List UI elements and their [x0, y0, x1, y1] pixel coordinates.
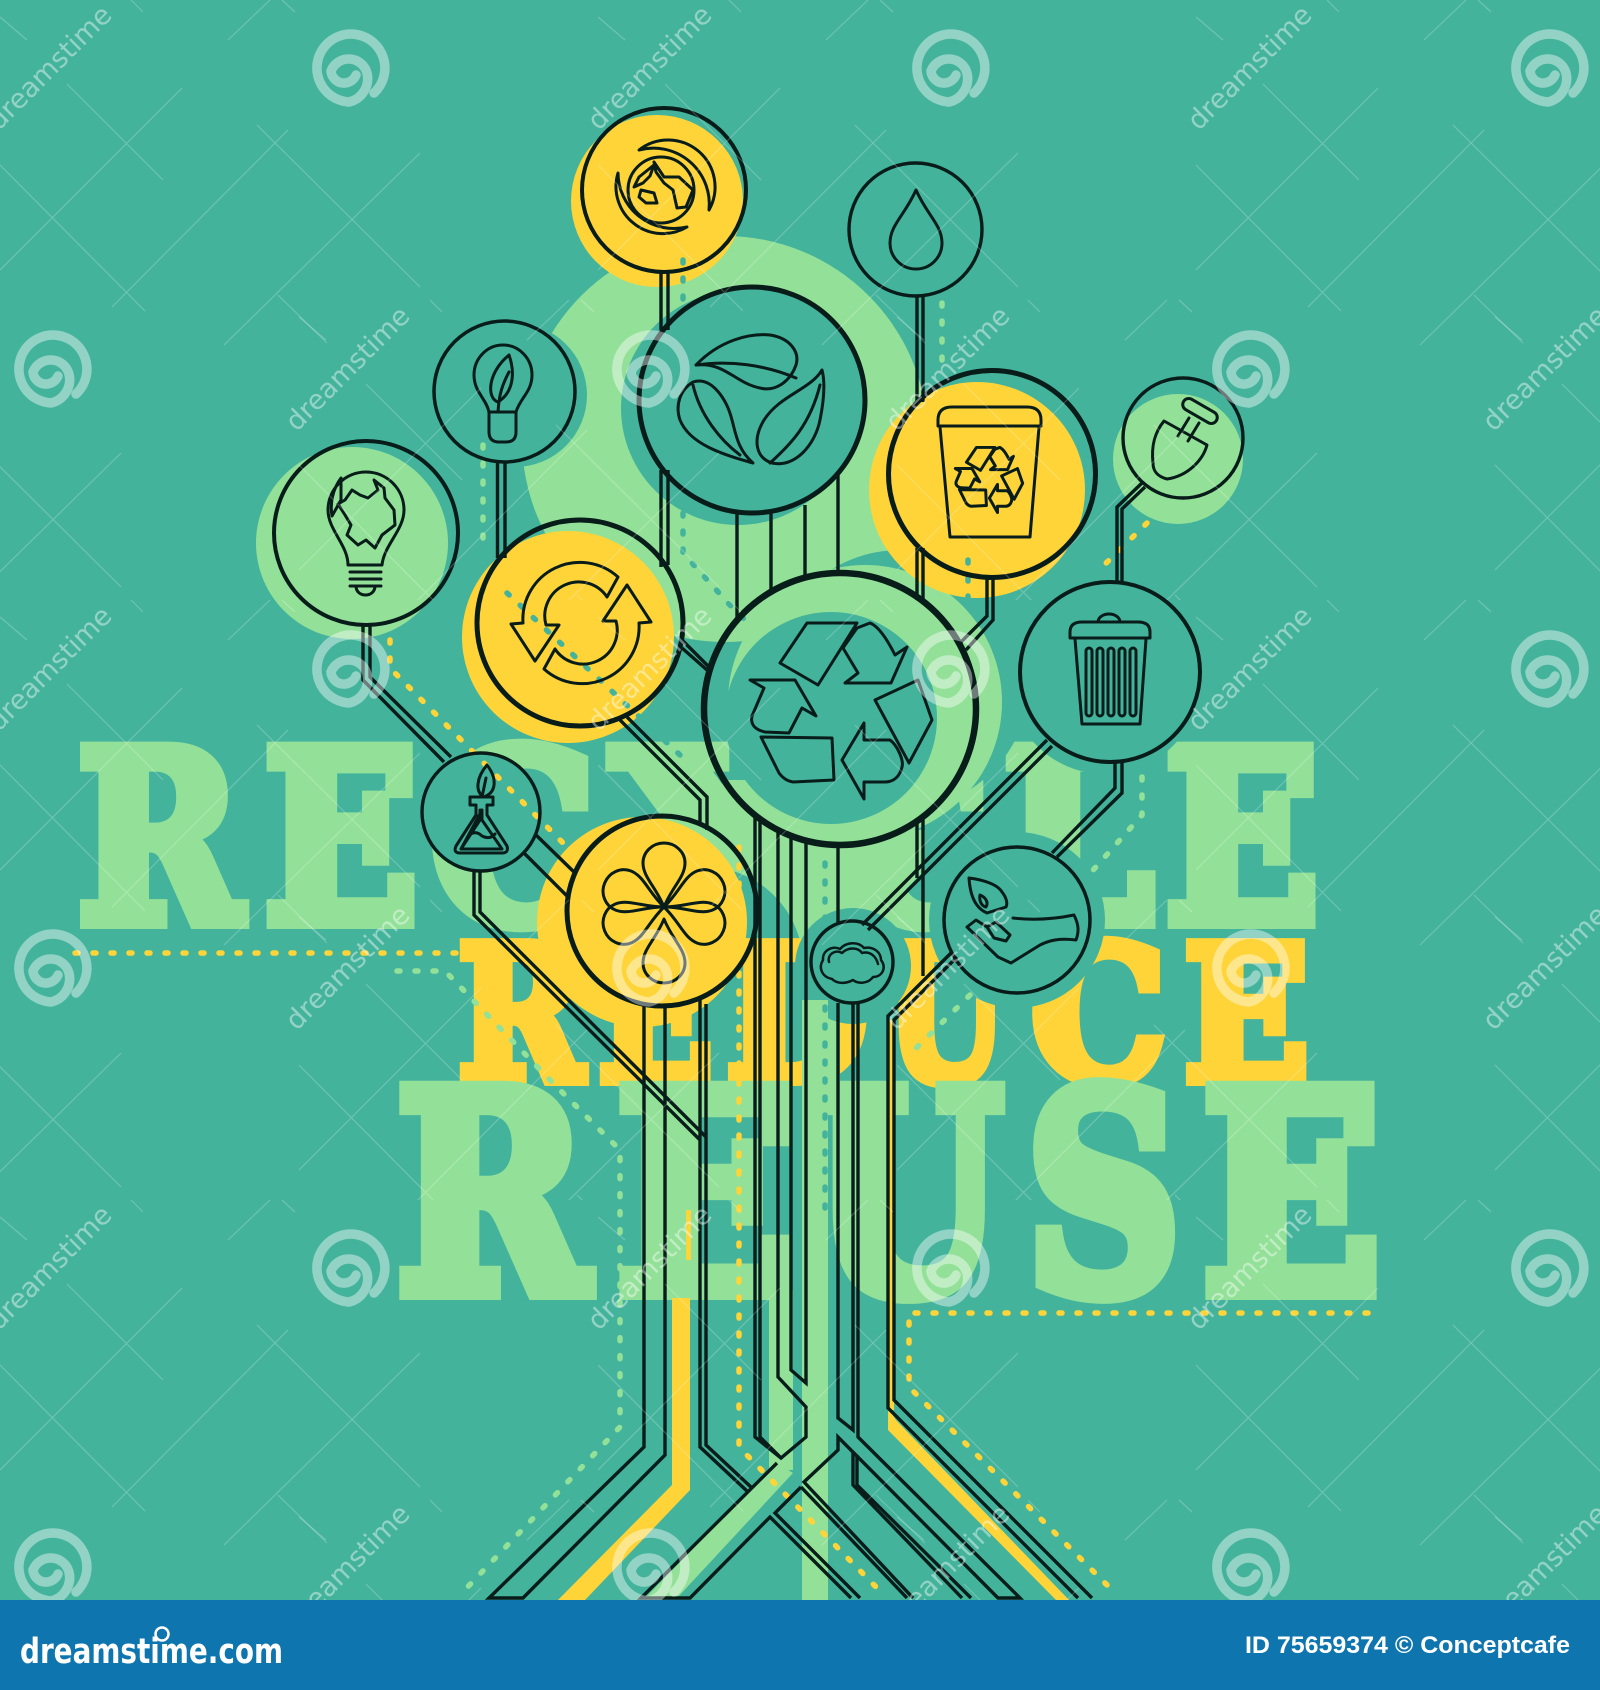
watermark: dreamstime text: dreamstime	[280, 301, 416, 437]
headline: REUSE	[396, 1033, 1381, 1357]
headline: RECYCLE: L	[1003, 701, 1153, 977]
headline: REDUCE: E	[598, 906, 713, 1124]
circle: trash can	[1020, 582, 1200, 762]
circle: flask	[422, 753, 540, 871]
connector lines: lower branches	[838, 740, 1122, 1598]
circle: shovel	[1123, 378, 1243, 498]
headline: REDUCE: D	[726, 906, 868, 1124]
main circle light green disc	[728, 565, 1002, 839]
coloured fill discs	[256, 115, 1243, 1027]
watermark: dreamstime text: dreamstime	[280, 900, 416, 1036]
headline: REUSE: R	[396, 1033, 591, 1357]
icon: earth light bulb	[328, 472, 404, 595]
headline: RECYCLE: C	[845, 701, 990, 977]
circle: water drop	[849, 163, 982, 296]
icon: shovel	[1152, 396, 1219, 479]
icon: globe with arrows	[616, 140, 715, 234]
circle: earth	[582, 108, 746, 272]
circle: recycling bin	[888, 370, 1096, 578]
icon: water drop	[890, 190, 942, 269]
circle: earth bulb	[274, 441, 458, 625]
watermark: dreamstime text: dreamstime	[582, 601, 718, 737]
trunk light green area	[722, 780, 840, 950]
footer bar	[0, 1600, 1600, 1690]
watermark: dreamstime text: dreamstime	[280, 1499, 416, 1635]
headline: REDUCE: U	[886, 906, 1006, 1124]
icon: three leaves	[678, 335, 824, 464]
icon: cloud	[821, 943, 884, 983]
icon: recycling symbol	[750, 623, 932, 799]
icon: hand holding leaf	[967, 878, 1078, 963]
icon: flower of drops	[597, 843, 731, 983]
main circle teal inner disc	[725, 612, 937, 824]
headline: RECYCLE: C	[430, 701, 596, 977]
headline: RECYCLE: R	[78, 701, 243, 977]
headline: REDUCE: E	[1184, 906, 1309, 1124]
icon: bulb with leaf	[474, 345, 532, 442]
circle: leaf bulb	[434, 321, 575, 462]
flower teal shadow disc	[607, 867, 803, 1063]
icon: flask with flame	[455, 765, 507, 853]
headline: REUSE: E	[1202, 1033, 1381, 1357]
watermark: dreamstime text: dreamstime	[880, 301, 1016, 437]
leaf circle teal fill	[641, 289, 863, 511]
circle: main recycling	[704, 573, 976, 845]
headline: REUSE: S	[1026, 1033, 1181, 1357]
big light green disc behind tree	[522, 236, 928, 642]
headline: REDUCE: C	[1031, 906, 1166, 1124]
headline: RECYCLE	[78, 701, 1319, 977]
icon: refresh arrows	[511, 562, 651, 684]
circle: leaves	[639, 287, 865, 513]
watermark: dreamstime text: dreamstime	[880, 900, 1016, 1036]
watermark: dreamstime text: dreamstime	[582, 1200, 718, 1336]
watermark: dreamstime text: dreamstime	[1182, 601, 1318, 737]
watermark: dreamstime text: dreamstime	[880, 1499, 1016, 1635]
circle: hand	[944, 847, 1090, 993]
watermark: dreamstime text: dreamstime	[582, 0, 718, 136]
headline: RECYCLE: E	[264, 701, 418, 977]
headline: REUSE: U	[812, 1033, 1003, 1357]
circle: flower	[567, 816, 757, 1006]
trunk lines	[474, 815, 1020, 1598]
watermark: dreamstime text: dreamstime	[1182, 0, 1318, 136]
footer logo spiral	[156, 1628, 168, 1640]
trunk light green column	[806, 830, 925, 1100]
headline: RECYCLE: Y	[614, 701, 833, 977]
circle: cloud	[811, 921, 893, 1003]
watermark: dreamstime text: dreamstime	[1182, 1200, 1318, 1336]
headline: REDUCE: R	[458, 906, 584, 1124]
footer image id and credit: ID 75659374 © Conceptcafe	[1245, 1632, 1570, 1659]
headline: RECYCLE: E	[1165, 701, 1319, 977]
headline: REDUCE	[458, 906, 1309, 1124]
connector lines: upper branches	[363, 272, 1145, 897]
trunk colour bands	[558, 1000, 1069, 1600]
dotted lines	[75, 260, 1368, 1595]
footer logo text: dreamstime.com	[20, 1632, 283, 1672]
teal shadow discs	[421, 291, 1201, 1024]
icon: recycling bin	[938, 407, 1041, 537]
circle: refresh	[477, 520, 683, 726]
icon: trash can	[1070, 614, 1150, 724]
headline: REUSE: E	[616, 1033, 797, 1357]
